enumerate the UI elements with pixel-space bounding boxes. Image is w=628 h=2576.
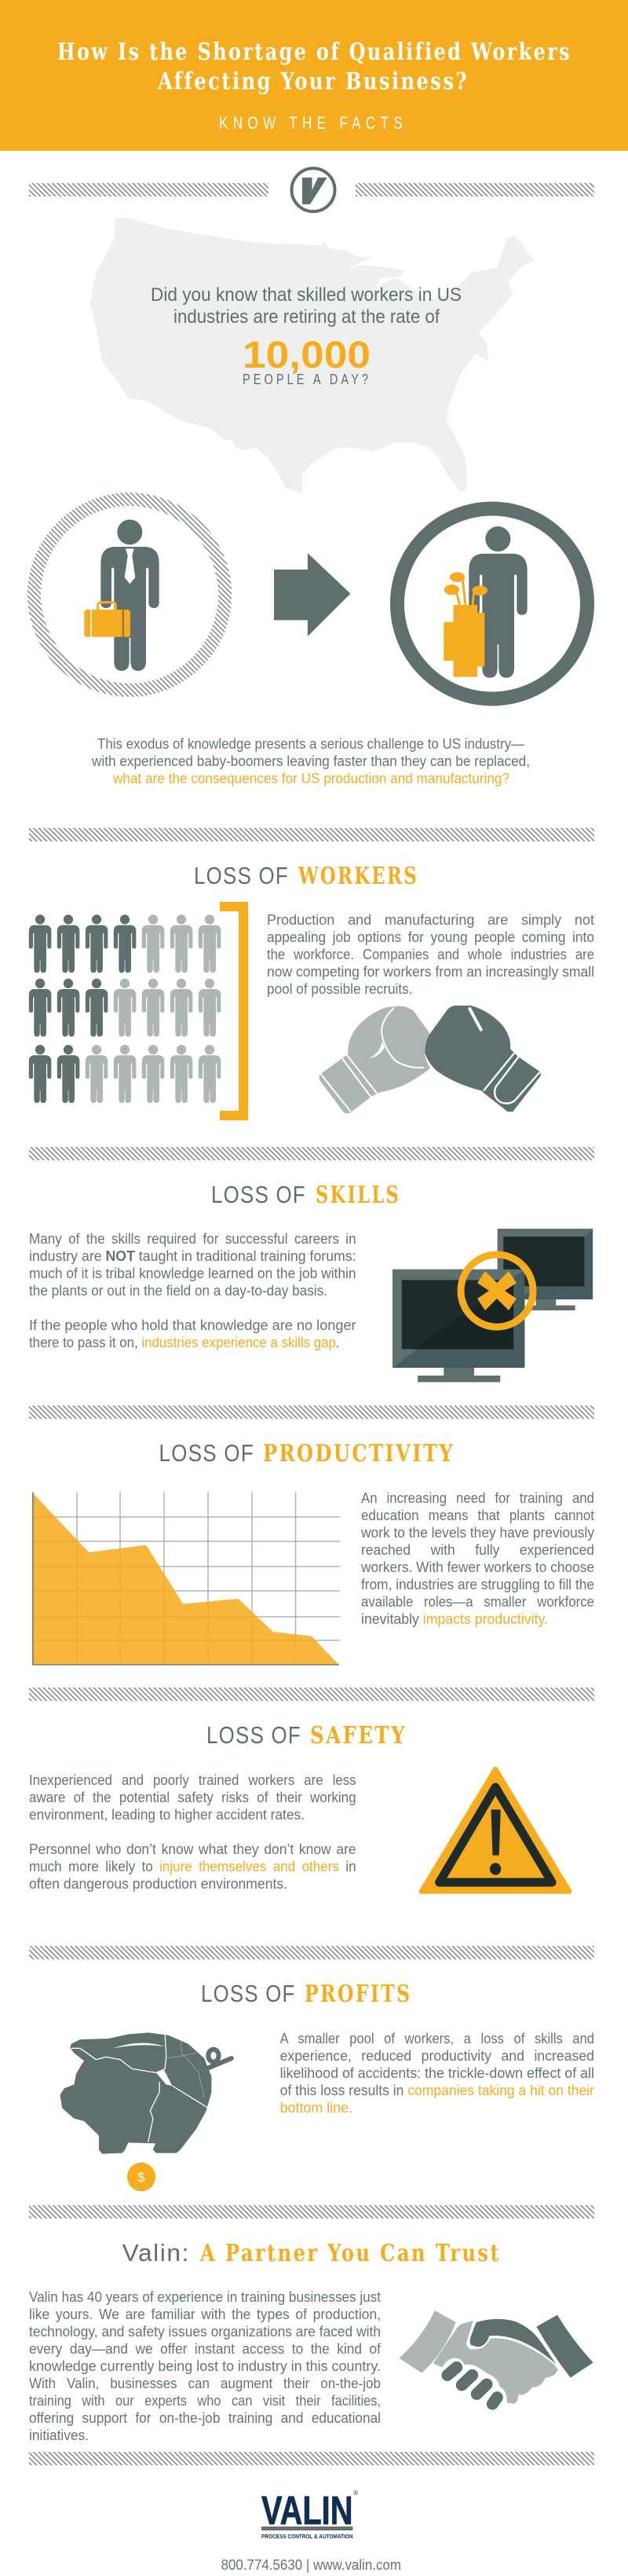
Valin logo: VALIN bbox=[261, 2488, 353, 2533]
panel: loss of profits bbox=[60, 1981, 594, 2191]
arrow bbox=[274, 553, 350, 636]
paragraph: knowledge currently being lost to industry in this country. bbox=[29, 2358, 381, 2374]
paragraph: the plants or out in the field on a day-to-day basis. bbox=[29, 1282, 327, 1299]
heading bbox=[122, 2240, 501, 2267]
paragraph: pool of possible recruits. bbox=[267, 980, 413, 997]
icon: retiree with golf bag bbox=[397, 509, 587, 699]
heading: PROFITS bbox=[305, 1981, 411, 2008]
text block: exodus of knowledge bbox=[91, 735, 530, 786]
question text: industries are retiring at the rate of bbox=[173, 306, 440, 328]
paragraph: appealing job options for young people coming into bbox=[267, 929, 594, 945]
icon: V logo bbox=[292, 168, 334, 211]
icon: warning triangle bbox=[422, 1769, 570, 1892]
paragraph bbox=[280, 2030, 594, 2116]
paragraph: the workforce. Companies and whole industries are bbox=[267, 946, 594, 962]
divider with logo bbox=[29, 168, 594, 211]
map of the United States bbox=[90, 218, 535, 493]
paragraph: available roles—a smaller workforce bbox=[361, 1593, 594, 1610]
paragraph: much of it is tribal knowledge learned on the job within bbox=[29, 1265, 356, 1281]
panel: footer bbox=[221, 2488, 401, 2573]
paragraph: every day—and we offer instant access to the kind of bbox=[29, 2340, 382, 2357]
paragraph: technology, and safety issues organizations are faced with bbox=[29, 2323, 381, 2340]
paragraph: Personnel who don’t know what they don’t know are bbox=[29, 1841, 356, 1857]
Valin logo: ® bbox=[353, 2490, 358, 2497]
icon: dollar coin bbox=[127, 2163, 155, 2191]
paragraph: reached with fully experienced bbox=[361, 1541, 594, 1558]
heading: LOSS OF bbox=[159, 1440, 254, 1467]
icon: cracked piggy bank bbox=[60, 2032, 232, 2154]
question text bbox=[151, 284, 462, 328]
paragraph: often dangerous production environments. bbox=[29, 1875, 287, 1892]
heading bbox=[201, 1981, 411, 2008]
paragraph: Valin has 40 years of experience in training businesses just bbox=[29, 2288, 381, 2305]
paragraph bbox=[360, 1490, 595, 1627]
paragraph: of this loss results in companies taking a hit on their bbox=[280, 2082, 594, 2098]
panel: loss of productivity bbox=[33, 1440, 595, 1665]
text block: exodus of knowledge: with experienced baby-boomers leaving faster than they can be replaced, bbox=[91, 753, 530, 769]
paragraph: much more likely to injure themselves and others in bbox=[29, 1858, 356, 1874]
paragraph bbox=[267, 911, 594, 997]
paragraph: likelihood of accidents: the trickle-down effect of all bbox=[280, 2065, 594, 2081]
paragraph: from, industries are struggling to fill the bbox=[361, 1576, 594, 1592]
title: Affecting Your Business? bbox=[157, 68, 469, 96]
paragraph: bottom line. bbox=[280, 2099, 352, 2116]
paragraph: industry are NOT taught in traditional training forums: bbox=[29, 1248, 356, 1264]
paragraph bbox=[29, 2288, 382, 2443]
heading bbox=[211, 1182, 400, 1209]
icon: boxing gloves bbox=[319, 1006, 541, 1113]
paragraph: aware of the potential safety risks of their working bbox=[29, 1789, 356, 1805]
text block: exodus of knowledge: what are the consequences for US production and manufacturing? bbox=[112, 770, 509, 786]
area chart bbox=[33, 1492, 340, 1665]
heading bbox=[159, 1440, 455, 1468]
heading: SAFETY bbox=[310, 1722, 407, 1750]
heading: LOSS OF bbox=[201, 1981, 295, 2007]
heading: Valin: bbox=[122, 2240, 190, 2266]
paragraph: education means that plants cannot bbox=[361, 1507, 594, 1523]
paragraph bbox=[29, 1772, 356, 1892]
paragraph: inevitably impacts productivity. bbox=[361, 1610, 548, 1627]
paragraph: Production and manufacturing are simply not bbox=[267, 911, 594, 928]
orange bracket bbox=[220, 902, 248, 1120]
paragraph: initiatives. bbox=[29, 2427, 89, 2443]
panel: header banner bbox=[0, 0, 628, 151]
heading: LOSS OF bbox=[206, 1722, 301, 1749]
paragraph: A smaller pool of workers, a loss of skills and bbox=[280, 2030, 594, 2047]
paragraph bbox=[29, 1230, 356, 1350]
panel: loss of safety bbox=[29, 1722, 570, 1892]
heading bbox=[206, 1722, 407, 1750]
statistic caption: PEOPLE A DAY? bbox=[243, 372, 371, 387]
subtitle: KNOW THE FACTS bbox=[219, 113, 407, 133]
heading: LOSS OF bbox=[194, 863, 289, 889]
paragraph: training with our experts who can visit their facilities, bbox=[29, 2392, 381, 2409]
paragraph: there to pass it on, industries experience a skills gap. bbox=[29, 1334, 340, 1350]
panel: worker to retiree bbox=[35, 500, 587, 699]
paragraph: If the people who hold that knowledge are no longer bbox=[29, 1317, 356, 1333]
heading: A Partner You Can Trust bbox=[199, 2240, 501, 2267]
pictogram of workers bbox=[29, 914, 221, 1103]
heading: PRODUCTIVITY bbox=[263, 1440, 455, 1468]
paragraph: offering support for on-the-job training and educational bbox=[29, 2409, 381, 2426]
contact details: 800.774.5630 | www.valin.com bbox=[221, 2557, 401, 2573]
paragraph: Inexperienced and poorly trained workers are less bbox=[29, 1772, 356, 1788]
heading bbox=[194, 863, 418, 890]
icon: dollar coin: $ bbox=[137, 2170, 145, 2185]
title bbox=[57, 38, 571, 96]
panel: US map fact bbox=[90, 218, 535, 493]
paragraph: With Valin, businesses can augment their on-the-job bbox=[29, 2375, 381, 2391]
paragraph: An increasing need for training and bbox=[361, 1490, 594, 1506]
icon: worker with briefcase bbox=[35, 500, 225, 690]
statistic: 10,000: 10,000 bbox=[243, 335, 371, 376]
panel: loss of workers bbox=[29, 863, 594, 1120]
heading: SKILLS bbox=[316, 1182, 400, 1209]
text block: exodus of knowledge: This exodus of knowledge presents a serious challenge to US industry— bbox=[97, 735, 524, 752]
panel: loss of skills bbox=[29, 1182, 593, 1382]
paragraph: workers. With fewer workers to choose bbox=[360, 1559, 594, 1575]
paragraph: like yours. We are familiar with the types of production, bbox=[29, 2306, 381, 2322]
Valin logo: PROCESS CONTROL & AUTOMATION bbox=[261, 2533, 353, 2540]
paragraph: now competing for workers from an increasingly small bbox=[267, 963, 594, 980]
question text: Did you know that skilled workers in US bbox=[151, 284, 462, 306]
icon: handshake bbox=[399, 2310, 593, 2404]
heading: WORKERS bbox=[298, 863, 418, 890]
paragraph: experience, reduced productivity and increased bbox=[280, 2047, 594, 2064]
icon: monitors with X bbox=[392, 1229, 593, 1382]
panel: Valin partner bbox=[29, 2240, 593, 2443]
heading: LOSS OF bbox=[211, 1182, 306, 1208]
paragraph: environment, leading to higher accident rates. bbox=[29, 1806, 305, 1823]
paragraph: Many of the skills required for successful careers in bbox=[29, 1230, 356, 1247]
paragraph: work to the levels they have previously bbox=[360, 1524, 595, 1541]
